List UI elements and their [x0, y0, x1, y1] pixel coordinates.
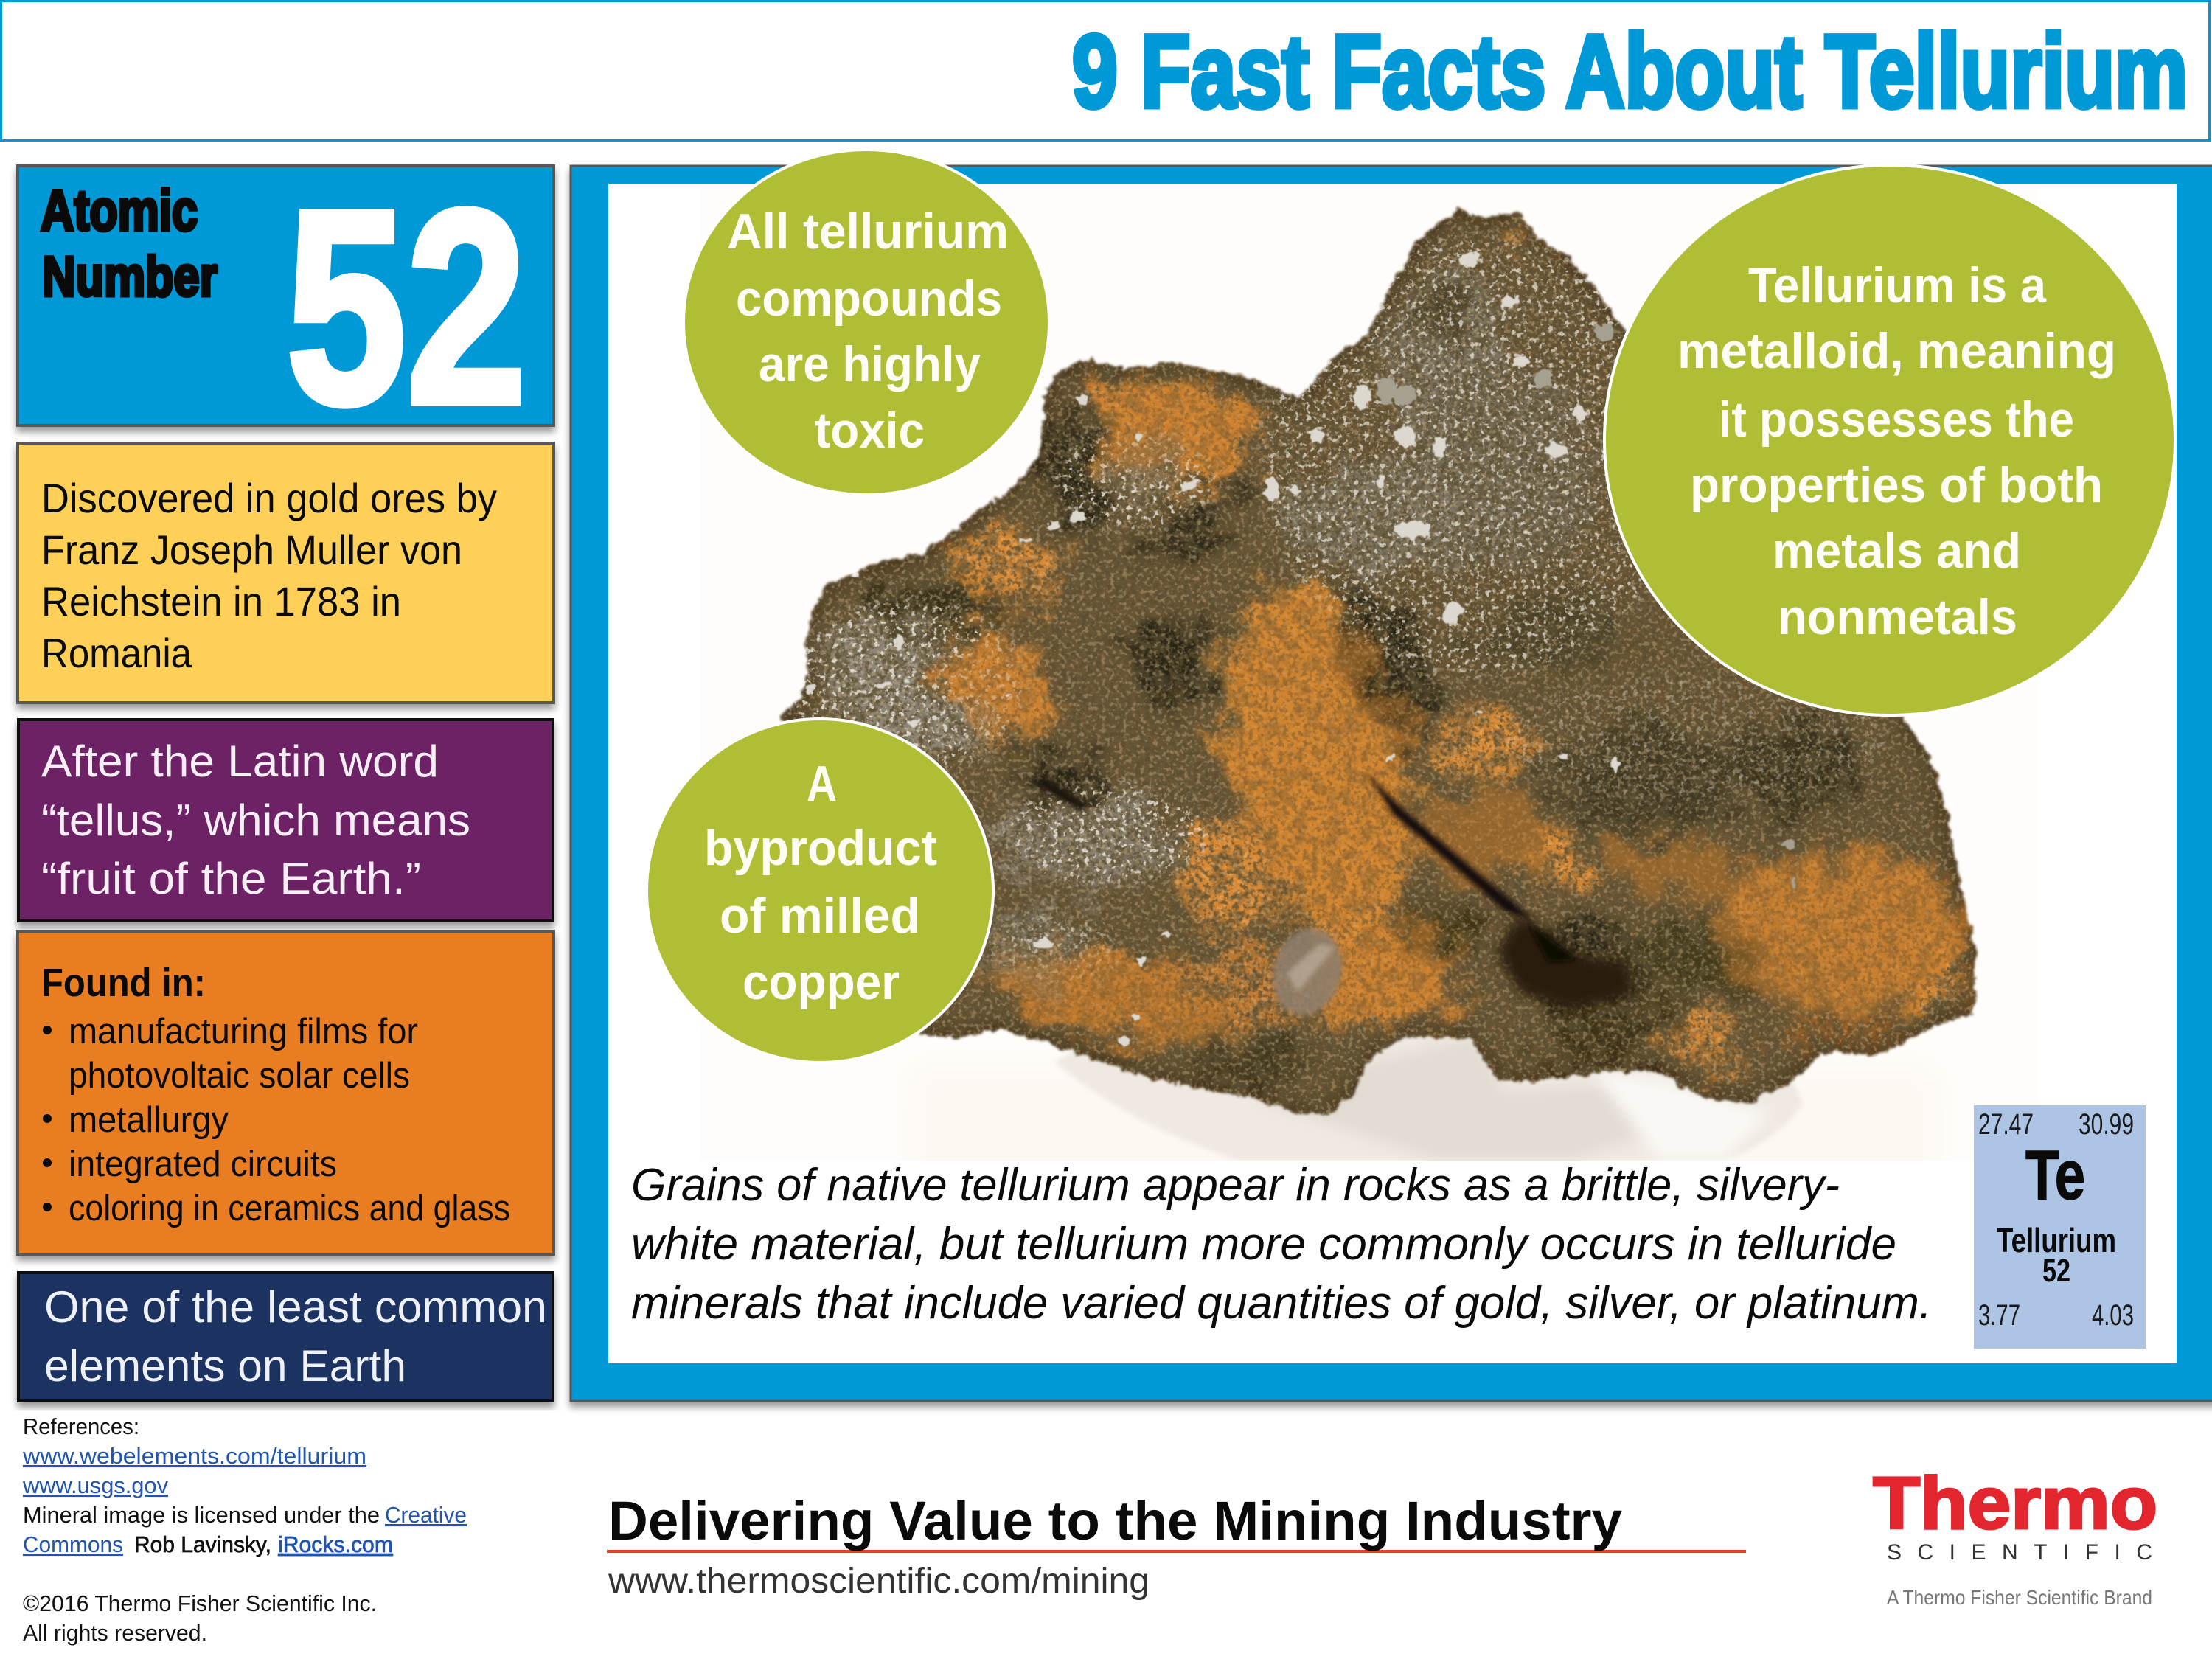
name origin text: After the Latin word — [41, 737, 439, 786]
references: All rights reserved. — [23, 1620, 207, 1646]
references: References: — [23, 1413, 139, 1439]
callout circle: byproduct — [647, 719, 993, 1062]
atomic number label: Number — [42, 246, 218, 308]
tagline: Delivering Value to the Mining Industry — [608, 1490, 1622, 1551]
atomic number label: Atomic — [41, 178, 198, 243]
logo subtitle: SCIENTIFIC — [1887, 1540, 2152, 1565]
rock — [779, 205, 1979, 1117]
discovery text: Romania — [41, 630, 192, 676]
toxic text: All tellurium — [727, 204, 1009, 260]
metalloid text: it possesses the — [1719, 392, 2074, 448]
metalloid text: metalloid, meaning — [1677, 323, 2116, 379]
discovery text: Franz Joseph Muller von — [41, 526, 462, 573]
found in list: integrated circuits — [69, 1144, 337, 1184]
found in list: metallurgy — [69, 1100, 229, 1140]
mineral photo — [778, 205, 1980, 1161]
discovery text: Discovered in gold ores by — [41, 475, 497, 521]
found in list: manufacturing films for — [69, 1012, 418, 1051]
callout circle: metalloid — [1604, 165, 2175, 715]
logo: Thermo Scientific: Thermo — [1873, 1462, 2157, 1545]
tile atomic number: 52 — [2042, 1253, 2070, 1289]
references: www.webelements.com/tellurium — [22, 1443, 366, 1469]
rock grey flakes — [1376, 324, 1798, 891]
rock crystal — [1263, 920, 1352, 1023]
toxic text: are highly — [759, 336, 981, 392]
panel: found in — [18, 931, 554, 1254]
rock crack — [1036, 772, 1633, 1010]
toxic text: toxic — [815, 403, 925, 459]
tile numbers: 4.03 — [2092, 1299, 2134, 1332]
rock dark areas — [870, 288, 1873, 1084]
tagline — [607, 1490, 1746, 1601]
rock orange areas — [947, 218, 1972, 1065]
caption: white material, but tellurium more commonly occurs in telluride — [631, 1219, 1896, 1270]
caption: Grains of native tellurium appear in rocks as a brittle, silvery- — [631, 1160, 1840, 1211]
references: Commons — [23, 1531, 123, 1557]
references: Mineral image is licensed under the — [23, 1502, 380, 1528]
caption: minerals that include varied quantities of gold, silver, or platinum. — [631, 1278, 1932, 1329]
periodic table tile — [1974, 1105, 2146, 1349]
metalloid text: metals and — [1773, 523, 2021, 579]
panel: mineral image frame — [571, 166, 2212, 1401]
discovery text: Reichstein in 1783 in — [41, 578, 401, 625]
found in list: coloring in ceramics and glass — [69, 1189, 510, 1228]
references: Creative — [385, 1502, 467, 1528]
rarity text: One of the least common — [44, 1282, 547, 1332]
tile numbers: 27.47 — [1978, 1108, 2034, 1141]
byproduct text — [704, 756, 937, 1010]
references — [22, 1413, 467, 1646]
header banner — [1, 1, 2209, 140]
toxic text — [727, 204, 1009, 459]
metalloid text — [1677, 257, 2116, 645]
rock grey metallic areas — [811, 258, 1600, 988]
rock edge shading — [780, 209, 1978, 1115]
atomic number label — [41, 178, 218, 308]
tile numbers: 3.77 — [1978, 1299, 2020, 1332]
name origin text: “fruit of the Earth.” — [41, 854, 421, 903]
tile numbers — [1978, 1108, 2134, 1332]
metalloid text: nonmetals — [1778, 589, 2017, 645]
caption — [631, 1160, 1932, 1329]
photo backdrop — [905, 1035, 1941, 1161]
found in list — [43, 1012, 510, 1228]
discovery text — [41, 475, 497, 676]
panel: discovery — [18, 443, 554, 703]
panel: atomic number — [18, 153, 554, 462]
references: iRocks.com — [278, 1531, 393, 1557]
rarity text — [44, 1282, 547, 1391]
atomic number value: 52 — [286, 153, 526, 462]
website: www.thermoscientific.com/mining — [608, 1562, 1150, 1601]
rock sparkles — [807, 253, 1620, 1047]
byproduct text: A — [807, 756, 837, 812]
rock texture — [700, 184, 2028, 1143]
name origin text — [41, 737, 470, 903]
references: ©2016 Thermo Fisher Scientific Inc. — [23, 1590, 377, 1616]
references: Rob Lavinsky, — [134, 1531, 271, 1557]
metalloid text: properties of both — [1690, 457, 2103, 513]
name origin text: “tellus,” which means — [41, 796, 470, 845]
toxic text: compounds — [736, 271, 1002, 327]
panel: rarity — [18, 1273, 553, 1401]
rarity text: elements on Earth — [44, 1341, 406, 1391]
tile name: Tellurium — [1997, 1221, 2116, 1259]
rock orange glaze — [951, 380, 1972, 1057]
byproduct text: copper — [742, 954, 900, 1010]
references: www.usgs.gov — [22, 1472, 168, 1498]
byproduct text: of milled — [720, 888, 920, 944]
tile symbol: Te — [2025, 1136, 2085, 1214]
panel: name origin — [18, 720, 553, 921]
byproduct text: byproduct — [704, 820, 937, 876]
logo brand line: A Thermo Fisher Scientific Brand — [1887, 1586, 2152, 1609]
metalloid text: Tellurium is a — [1748, 257, 2047, 313]
callout circle: toxic — [684, 150, 1049, 495]
found in heading: Found in: — [41, 961, 206, 1005]
logo: Thermo Scientific — [1873, 1462, 2157, 1609]
tile numbers: 30.99 — [2079, 1108, 2134, 1141]
found in list: photovoltaic solar cells — [69, 1056, 410, 1096]
